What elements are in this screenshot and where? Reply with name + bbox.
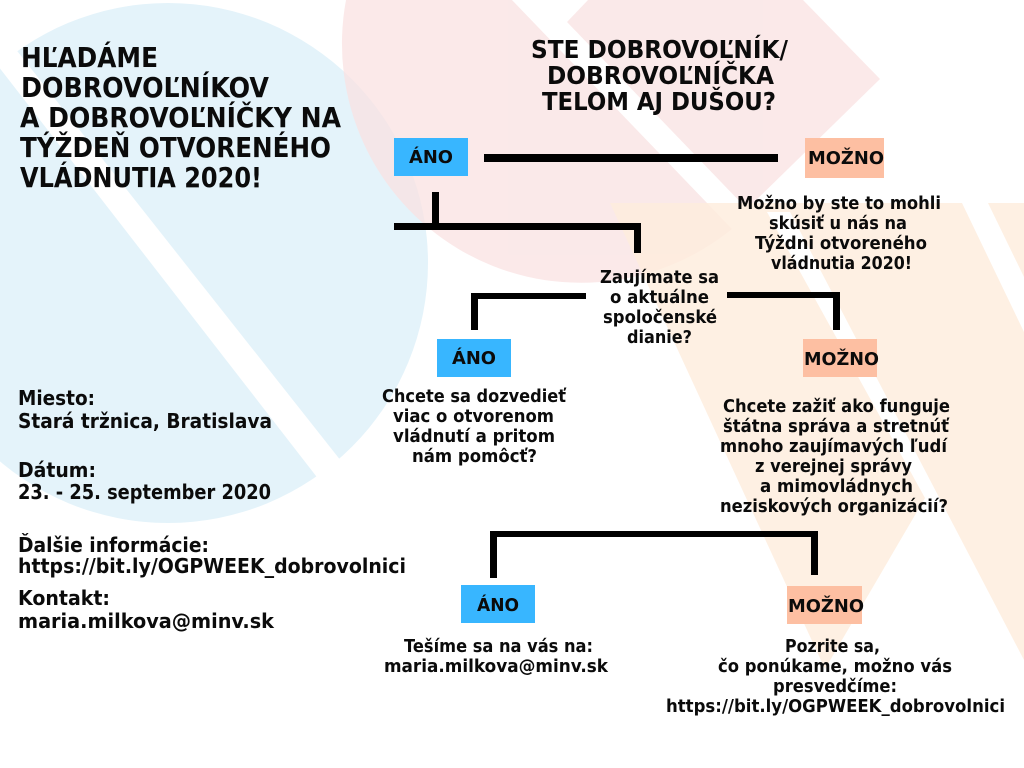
- connector: second question to maybe: [727, 292, 840, 330]
- button: mozno 3: MOŽNO: [788, 595, 864, 617]
- text: yes answer two: [382, 386, 567, 467]
- button: ano 3: [461, 585, 535, 623]
- event details: place, date, info, contact: 23. - 25. september 2020: [18, 480, 271, 504]
- text: maybe answer one: Možno by ste to mohli: [737, 193, 941, 214]
- connector: first yes to maybe: [484, 154, 778, 162]
- text: second question: dianie?: [627, 327, 692, 348]
- button: mozno 3: [787, 586, 864, 624]
- flowchart heading question: [531, 35, 788, 116]
- event details: place, date, info, contact: https://bit.ly/OGPWEEK_dobrovolnici: [18, 554, 406, 578]
- text: yes answer three: [384, 636, 609, 677]
- event details: place, date, info, contact: Stará tržnica, Bratislava: [18, 409, 272, 433]
- text: yes answer two: vládnutí a pritom: [393, 426, 555, 447]
- event details: place, date, info, contact: Kontakt:: [18, 586, 110, 610]
- event details: place, date, info, contact: Miesto:: [18, 386, 95, 410]
- background: blue circle cut by a stripe: [0, 3, 428, 523]
- button: mozno 1: [805, 138, 884, 178]
- text: maybe answer three: čo ponúkame, možno vás: [718, 656, 952, 677]
- text: second question: Zaujímate sa: [600, 267, 719, 288]
- text: yes answer two: viac o otvorenom: [393, 406, 554, 427]
- event details: place, date, info, contact: Ďalšie informácie:: [18, 533, 209, 557]
- background: pink circle and chevron: [342, 0, 880, 283]
- text: maybe answer one: vládnutia 2020!: [771, 253, 912, 274]
- title: looking for volunteers: VLÁDNUTIA 2020!: [20, 160, 262, 194]
- connector: first yes to second question: [394, 192, 641, 253]
- text: maybe answer two: štátna správa a stretnúť: [723, 416, 950, 437]
- text: maybe answer one: [737, 193, 941, 274]
- event details: place, date, info, contact: [18, 386, 406, 633]
- button: ano 1: ÁNO: [409, 146, 453, 168]
- button: mozno 2: MOŽNO: [804, 348, 879, 370]
- text: maybe answer two: [720, 396, 950, 517]
- title: looking for volunteers: [20, 40, 342, 194]
- event details: place, date, info, contact: Dátum:: [18, 458, 96, 482]
- text: maybe answer two: neziskových organizácií?: [720, 496, 948, 517]
- text: maybe answer two: mnoho zaujímavých ľudí: [720, 436, 948, 457]
- background: orange chevrons: [610, 203, 1024, 669]
- text: maybe answer two: a mimovládnych: [760, 476, 913, 497]
- text: maybe answer three: Pozrite sa,: [785, 636, 880, 657]
- text: yes answer two: nám pomôcť?: [412, 446, 537, 467]
- title: looking for volunteers: A DOBROVOĽNÍČKY NA: [20, 100, 342, 134]
- text: maybe answer two: Chcete zažiť ako funguje: [723, 396, 950, 417]
- text: yes answer two: Chcete sa dozvedieť: [382, 386, 567, 407]
- button: mozno 1: MOŽNO: [808, 147, 884, 169]
- connector: bottom branch: [490, 531, 818, 578]
- text: maybe answer one: skúsiť u nás na: [769, 213, 907, 234]
- button: ano 2: [437, 339, 511, 377]
- flowchart heading question: STE DOBROVOĽNÍK/: [531, 35, 788, 64]
- title: looking for volunteers: HĽADÁME: [21, 40, 158, 74]
- text: yes answer three: maria.milkova@minv.sk: [384, 656, 609, 677]
- text: maybe answer two: z verejnej správy: [755, 456, 912, 477]
- event details: place, date, info, contact: maria.milkova@minv.sk: [18, 609, 275, 633]
- text: second question: o aktuálne: [610, 287, 709, 308]
- text: second question: spoločenské: [603, 307, 717, 328]
- text: maybe answer three: presvedčíme:: [773, 676, 897, 697]
- text: yes answer three: Tešíme sa na vás na:: [404, 636, 593, 657]
- text: maybe answer one: Týždni otvoreného: [755, 233, 927, 254]
- title: looking for volunteers: DOBROVOĽNÍKOV: [21, 70, 270, 104]
- connector: second question to yes: [471, 293, 586, 330]
- title: looking for volunteers: TÝŽDEŇ OTVORENÉHO: [20, 130, 331, 164]
- flowchart heading question: DOBROVOĽNÍČKA: [547, 60, 774, 90]
- button: ano 3: ÁNO: [477, 594, 519, 616]
- button: mozno 2: [803, 339, 879, 377]
- flowchart heading question: TELOM AJ DUŠOU?: [542, 86, 776, 116]
- text: second question: [600, 267, 719, 348]
- text: maybe answer three: [666, 636, 1005, 717]
- button: ano 1: [394, 138, 468, 176]
- button: ano 2: ÁNO: [452, 347, 496, 369]
